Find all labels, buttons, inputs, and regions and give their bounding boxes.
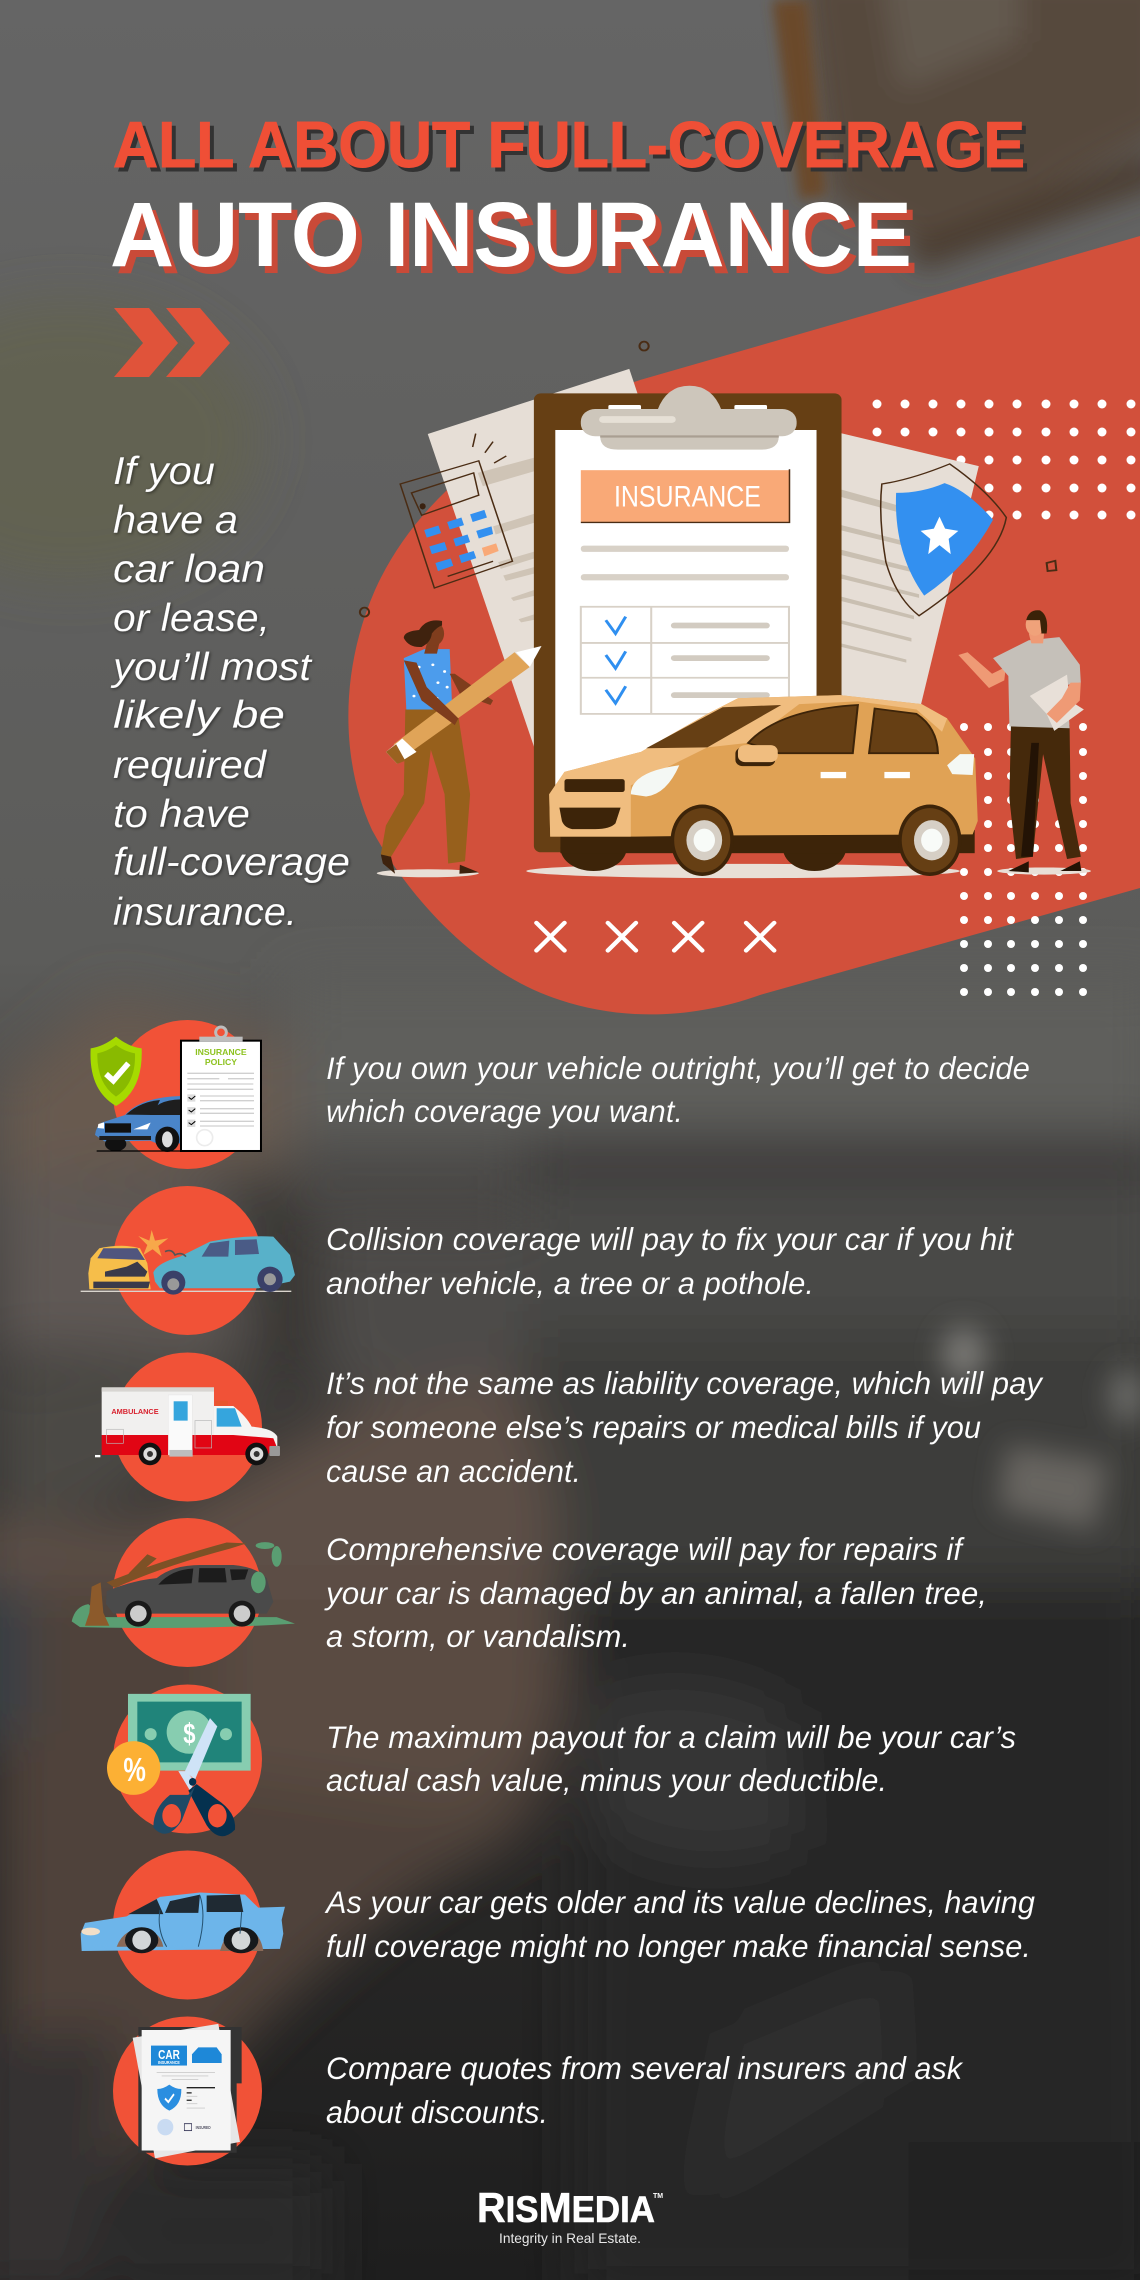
text item 4: a storm, or vandalism. (326, 1618, 630, 1654)
intro text: likely be (113, 694, 285, 737)
x marks (536, 923, 774, 950)
text item 1 (326, 1050, 1030, 1129)
text item 5: The maximum payout for a claim will be your car’s (326, 1719, 1016, 1755)
dot pattern: top right (872, 400, 1136, 520)
text item 5: actual cash value, minus your deductible. (326, 1762, 887, 1798)
icon circle 7 (113, 2016, 262, 2166)
upper band shapes, mapped from photo (0, 977, 1140, 1664)
icon: car insurance documents: CAR (158, 2048, 180, 2062)
intro text (110, 450, 350, 934)
icon: fallen tree on car (72, 1542, 295, 1628)
logo: RISMedia: RISMEDIA (477, 2184, 655, 2231)
ground shadows (377, 864, 1091, 878)
intro text: have a (113, 499, 238, 542)
panel: list item 1 (90, 1020, 1030, 1169)
icon circle 5 (113, 1684, 262, 1834)
text item 7: Compare quotes from several insurers and ask (326, 2050, 964, 2086)
paper: left sheet (428, 369, 646, 776)
decoration: small circles and square (360, 342, 1056, 617)
illustration: insurance hero scene (360, 342, 1091, 950)
icon circle 4 (113, 1518, 262, 1667)
intro text: you’ll most (110, 646, 313, 689)
icon: policy and car: POLICY (205, 1057, 237, 1067)
clipboard clip (581, 386, 797, 450)
lower band shapes, mapped from photo (0, 1583, 1140, 2280)
text item 3: cause an accident. (326, 1453, 581, 1489)
text item 2 (326, 1221, 1014, 1301)
icon: policy and car: INSURANCE (195, 1047, 247, 1057)
checklist table (581, 607, 789, 714)
text item 4: your car is damaged by an animal, a fallen tree, (324, 1575, 987, 1611)
intro text: to have (113, 793, 250, 836)
text item 6: As your car gets older and its value declines, having (324, 1884, 1035, 1920)
text item 3 (326, 1365, 1044, 1489)
text item 1: If you own your vehicle outright, you’ll get to decide (326, 1050, 1030, 1086)
text item 6: full coverage might no longer make financial sense. (326, 1928, 1031, 1964)
panel: list item 3 (95, 1352, 1044, 1502)
panel: list item 6 (81, 1850, 1035, 2000)
heading: auto insurance: AUTO INSURANCE (116, 191, 918, 293)
text lines (581, 546, 789, 580)
text item 4: Comprehensive coverage will pay for repairs if (326, 1531, 965, 1567)
icon circle 2 (113, 1186, 262, 1335)
text item 5 (326, 1719, 1016, 1798)
icon circle 3 (113, 1352, 262, 1502)
text item 7 (326, 2050, 964, 2130)
heading: auto insurance: AUTO INSURANCE (110, 184, 912, 286)
icon: ambulance (95, 1387, 280, 1465)
clipboard paper (555, 430, 817, 814)
car (549, 695, 978, 876)
woman with pencil (381, 620, 542, 874)
text item 3: for someone else’s repairs or medical bills if you (326, 1409, 981, 1445)
insurance label: INSURANCE (614, 479, 761, 513)
icon: car insurance documents: INSURED (196, 2126, 211, 2130)
intro text: required (113, 744, 267, 787)
icon: car insurance documents: INSURANCE (158, 2060, 180, 2065)
icon: ambulance: AMBULANCE (111, 1407, 159, 1416)
icon: calculator (400, 434, 512, 588)
logo: RISMedia: TM (653, 2193, 663, 2200)
intro text: insurance. (113, 891, 297, 934)
panel: list item 4 (72, 1518, 987, 1667)
intro text: If you (113, 450, 215, 493)
panel: list item 2 (81, 1186, 1014, 1335)
paper: right sheet (830, 430, 979, 723)
panel: list item 7 (113, 2016, 964, 2166)
man with papers (958, 610, 1084, 872)
icon: policy and car (90, 1027, 261, 1152)
icon circle 1 (113, 1020, 262, 1169)
icon: collision (81, 1230, 295, 1295)
clipboard board (534, 393, 842, 852)
intro text: or lease, (113, 597, 270, 640)
text item 2: another vehicle, a tree or a pothole. (326, 1265, 814, 1301)
icon: cash, percent and scissors: $ (183, 1719, 195, 1750)
text item 6 (324, 1884, 1035, 1964)
heading: all about full-coverage: ALL ABOUT FULL-COVERAGE (117, 112, 1029, 185)
text item 2: Collision coverage will pay to fix your car if you hit (326, 1221, 1014, 1257)
intro text: car loan (113, 548, 265, 591)
logo: RISMedia: Integrity in Real Estate. (499, 2230, 641, 2246)
dot pattern: bottom right (960, 723, 1087, 996)
insurance label (581, 469, 789, 522)
intro text: full-coverage (113, 841, 350, 884)
panel: red blob (348, 236, 1140, 1014)
text item 1: which coverage you want. (326, 1093, 683, 1129)
panel: list item 5 (107, 1684, 1016, 1836)
heading: all about full-coverage: ALL ABOUT FULL-COVERAGE (113, 108, 1025, 181)
icon: cash, percent and scissors: % (123, 1752, 146, 1789)
icon: damaged old car (81, 1892, 285, 1953)
icon: cash, percent and scissors (107, 1694, 251, 1836)
text item 3: It’s not the same as liability coverage, which will pay (326, 1365, 1044, 1401)
icon circle 6 (113, 1850, 262, 2000)
text item 7: about discounts. (326, 2094, 548, 2130)
icon: blue shield (881, 464, 1006, 616)
icon: double chevron arrow (114, 308, 230, 377)
icon: car insurance documents (133, 2024, 242, 2158)
text item 4 (324, 1531, 987, 1654)
